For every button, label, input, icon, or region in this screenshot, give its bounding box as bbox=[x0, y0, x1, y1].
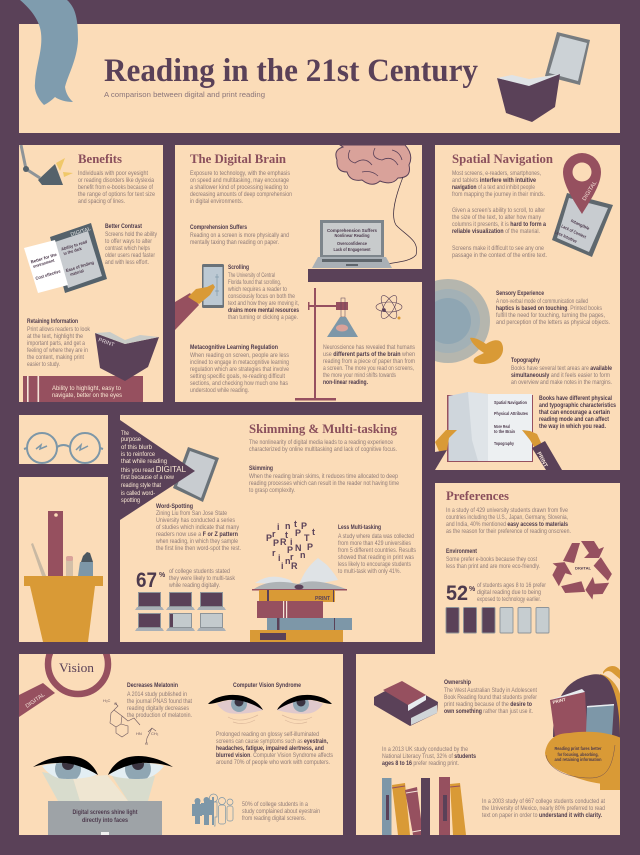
scattered letters: R bbox=[280, 537, 287, 547]
text block: eyestrain stat: 50% of college students in a bbox=[242, 801, 309, 808]
screen with caption: directly into faces bbox=[82, 817, 128, 824]
icon: laptop with list: Lack of Engagement bbox=[334, 247, 371, 252]
callout: triangle blurb: this you read DIGITAL bbox=[121, 464, 186, 474]
text block: ownership: print reading because of the desire to bbox=[444, 701, 532, 708]
text block: the range of options for text size bbox=[78, 191, 156, 198]
icon: touch circles and pointing hand bbox=[435, 279, 504, 364]
icon: pot bbox=[24, 576, 103, 642]
text block: retaining information: easier to study. bbox=[27, 361, 60, 368]
text block: comprehension suffers: Reading on a screen is more physically and bbox=[190, 232, 289, 239]
text block: decreases melatonin: A 2014 study published in bbox=[127, 691, 187, 698]
scattered letters: t bbox=[285, 530, 288, 540]
icon: recycle symbol bbox=[547, 541, 618, 603]
text block: Mexico study: In a 2003 study of 667 college students conducted at bbox=[482, 798, 605, 805]
callout: physical and typographic characteristics: the way in which you read. bbox=[539, 423, 606, 430]
red book spine callout bbox=[23, 376, 143, 402]
text block: decreases melatonin: the production of melatonin. bbox=[127, 712, 192, 719]
text block: environment: Some prefer e-books because they cost bbox=[446, 556, 537, 563]
text block: intro: in digital environments. bbox=[190, 198, 243, 205]
text block: intro: a shallower kind of processing leading to bbox=[190, 184, 289, 191]
panel: vision bbox=[19, 634, 343, 835]
icon: tablet bbox=[173, 447, 219, 502]
screen with caption: Digital screens shine light bbox=[72, 809, 138, 816]
text block: scrolling: consciously focus on both the bbox=[228, 293, 296, 300]
icon: marker bbox=[78, 552, 93, 576]
text block: intro: Exposure to technology, with the emphasis bbox=[190, 170, 290, 177]
text block: topography: Topography bbox=[511, 357, 540, 364]
text block: decreases melatonin bbox=[127, 682, 192, 719]
text block: and spacing of lines. bbox=[78, 198, 125, 205]
icon: open book held by hands: to the Brain bbox=[494, 429, 515, 434]
icon: melatonin molecule: O bbox=[114, 701, 117, 706]
text block: better contrast: Better Contrast bbox=[105, 223, 143, 230]
text block: ownership: Book Reading found that students prefer bbox=[444, 694, 537, 701]
text block: word-spotting: Word-Spotting bbox=[156, 503, 193, 510]
text block: intro bbox=[249, 439, 397, 453]
text block: metacognitive learning regulation: regulation which are strategies that involve bbox=[190, 366, 290, 373]
text block: environment: Environment bbox=[446, 548, 478, 555]
text block: scrolling: than turning or clicking a page. bbox=[228, 314, 298, 321]
icon: backpack bbox=[545, 666, 621, 790]
text block: context: Screens make it difficult to see any one bbox=[452, 245, 545, 252]
panel: header bbox=[19, 24, 620, 133]
text block: environment bbox=[446, 548, 540, 570]
text block: neuroscience: Neuroscience has revealed that humans bbox=[323, 344, 415, 351]
scattered letters: T bbox=[304, 533, 310, 543]
text block: scrolling: drains more mental resources bbox=[228, 307, 299, 314]
text block: ownership: Ownership bbox=[444, 679, 471, 686]
callout: triangle blurb: purpose bbox=[121, 436, 141, 443]
panel: benefits bbox=[19, 145, 163, 402]
tablet and page comparison: DIGITAL bbox=[70, 226, 92, 238]
text block: retaining information: Print allows readers to look bbox=[27, 326, 91, 333]
text block: UK study bbox=[382, 746, 477, 767]
text block: UK study: National Literacy Trust, 32% of students bbox=[382, 753, 477, 760]
icon: desk lamp bbox=[21, 145, 73, 185]
scattered letters: R bbox=[291, 561, 298, 571]
stat: 67 percent: 67 bbox=[136, 569, 157, 592]
icon: stack of books bbox=[250, 558, 352, 642]
scattered letters: t bbox=[294, 519, 297, 529]
text block: intro: as the reason for their preference of reading onscreen. bbox=[446, 528, 571, 535]
chart: laptop pictogram bbox=[135, 592, 226, 631]
icon: open book held by hands: Spatial Navigation bbox=[494, 400, 527, 405]
text block: intro: decreasing amounts of deep comprehension bbox=[190, 191, 292, 198]
text block: word-spotting: when reading, in which they sample bbox=[155, 538, 239, 545]
text block bbox=[78, 170, 156, 205]
callout: physical and typographic characteristics: reading mode and can affect bbox=[539, 416, 610, 423]
callout: physical and typographic characteristics bbox=[539, 395, 616, 430]
text block: retaining information: the content, making print bbox=[27, 354, 84, 361]
text block: neuroscience: a screen. The more you read on screens, bbox=[323, 365, 414, 372]
icon: tired eyes bbox=[208, 695, 332, 724]
scattered letters: r bbox=[272, 548, 276, 558]
text block: sensory experience: Sensory Experience bbox=[496, 290, 544, 297]
text block: decreases melatonin: Decreases Melatonin bbox=[127, 682, 178, 689]
text block: intuitive navigation: Most screens, e-readers, smartphones, bbox=[452, 170, 541, 177]
text block: skimming: When the reading brain skims, it reduces time allocated to deep bbox=[249, 473, 399, 480]
text block: less multi-tasking: Less Multi-tasking bbox=[338, 524, 381, 531]
icon: glasses bbox=[24, 433, 103, 463]
text block: better contrast bbox=[105, 223, 158, 266]
text block: intuitive navigation: and tablets interfere with intuitive bbox=[452, 177, 537, 184]
text block: retaining information: important parts, and get a bbox=[27, 340, 86, 347]
text block: UK study: In a 2013 UK study conducted by the bbox=[382, 746, 469, 753]
heading: Spatial Navigation bbox=[452, 151, 554, 166]
callout: physical and typographic characteristics: Books have different physical bbox=[539, 395, 612, 402]
text block: word-spotting: the first line then word-spot the rest. bbox=[156, 545, 241, 552]
text block: better contrast: older users read faster bbox=[105, 252, 155, 259]
text block: scrolling bbox=[227, 264, 299, 321]
text block: metacognitive learning regulation bbox=[190, 344, 290, 394]
text block: intro bbox=[190, 170, 292, 205]
text block: metacognitive learning regulation: understood while reading. bbox=[190, 387, 249, 394]
text block: comprehension suffers bbox=[190, 224, 289, 246]
icon: laptop with list: Nonlinear Reading bbox=[334, 233, 370, 238]
scattered letters: n bbox=[285, 556, 290, 566]
scattered letters: P bbox=[295, 528, 301, 538]
panel: pencil pot bbox=[19, 477, 108, 642]
text block: ownership: own something rather than just use it. bbox=[444, 708, 533, 715]
text block: comprehension suffers: Comprehension Suffers bbox=[190, 224, 247, 231]
icon: open book held by hands: Topography bbox=[494, 441, 514, 446]
panel: preferences bbox=[356, 483, 621, 835]
text block: visualization: reliable visualization of the material. bbox=[452, 228, 540, 235]
text block: less multi-tasking: from 5 different countries. Results bbox=[338, 547, 416, 554]
text block: computer vision syndrome: around 70% of people who work with computers. bbox=[216, 759, 330, 766]
tablet and page comparison bbox=[24, 223, 107, 293]
icon: melatonin molecule: O bbox=[145, 741, 148, 746]
scattered letters: i bbox=[290, 537, 293, 547]
scattered letters: i bbox=[281, 561, 284, 571]
icon: brain bbox=[336, 145, 417, 264]
heading: Preferences bbox=[446, 488, 509, 503]
text block: eyestrain stat: from reading digital screens. bbox=[242, 815, 306, 822]
text block: better contrast: to offer ways to alter bbox=[105, 238, 152, 245]
text block: topography bbox=[511, 357, 613, 386]
text block: sensory experience: fulfill the need for touching, turning the pages, bbox=[496, 312, 605, 319]
text block: better contrast: and with less effort. bbox=[105, 259, 149, 266]
text block: comprehension suffers: mentally taxing than reading on paper. bbox=[190, 239, 279, 246]
text block: Mexico study bbox=[482, 798, 605, 819]
text block: environment: less than print and are more eco-friendly. bbox=[446, 563, 540, 570]
text block: benefit from e-books because of bbox=[78, 184, 153, 191]
text block: better contrast: Screens hold the ability bbox=[105, 231, 158, 238]
icon: print book: PRINT bbox=[97, 337, 115, 349]
icon: melatonin molecule: H₃C bbox=[103, 698, 111, 703]
text block: context: passage in the context of the entire text. bbox=[452, 252, 547, 259]
stat: 52 percent bbox=[446, 582, 546, 605]
icon: backpack: and retaining information bbox=[554, 757, 602, 762]
text block: topography: an overview and make notes in the margins. bbox=[511, 379, 612, 386]
callout: triangle blurb: is called word- bbox=[121, 490, 155, 497]
text block: visualization: the size of the text, to alter how many bbox=[452, 214, 542, 221]
icon: laptop with list: Overconfidence bbox=[337, 241, 368, 246]
text block: scrolling: Florida found that scrolling, bbox=[228, 279, 281, 286]
text block: neuroscience: non-linear reading. bbox=[323, 379, 368, 386]
icon: eraser bbox=[66, 556, 73, 576]
red book spine callout: navigate, better on the eyes bbox=[52, 392, 122, 399]
text block: metacognitive learning regulation: inclined to engage in metacognitive learning bbox=[190, 359, 289, 366]
scattered letters: n bbox=[285, 521, 290, 531]
light beams bbox=[42, 772, 155, 801]
text block: visualization: Given a screen's ability to scroll, to alter bbox=[452, 207, 545, 214]
icon: stack of books: PRINT bbox=[315, 596, 330, 602]
text block: metacognitive learning regulation: When reading on screen, people are less bbox=[190, 352, 289, 359]
icon: open book held by hands: PRINT bbox=[535, 451, 549, 469]
text block: scrolling: The University of Central bbox=[228, 272, 275, 279]
text block: Individuals with poor eyesight bbox=[78, 170, 148, 177]
heading: Benefits bbox=[78, 151, 122, 166]
stat: 67 percent bbox=[136, 568, 236, 592]
text block: sensory experience: and perception of the letters as physical objects. bbox=[496, 319, 610, 326]
stat: 52 percent: of students ages 8 to 16 prefer bbox=[477, 582, 546, 589]
icon: tablet and book bbox=[497, 32, 590, 122]
text block: retaining information bbox=[27, 318, 91, 368]
text block: better contrast: contrast which helps bbox=[105, 245, 150, 252]
text block: eyestrain stat: study complained about eyestrain bbox=[242, 808, 320, 815]
heading: Skimming & Multi-tasking bbox=[249, 421, 397, 436]
icon: map pin on tablet: Lack of Context bbox=[560, 223, 587, 240]
panel: skimming and multi-tasking bbox=[120, 415, 422, 642]
text block: less multi-tasking: to multi-task with only 41%. bbox=[338, 568, 401, 575]
icon: large eyes bbox=[33, 756, 173, 779]
scattered letters: P bbox=[307, 542, 313, 552]
text block: intuitive navigation: from mapping the journey in their minds. bbox=[452, 191, 545, 198]
tablet and page comparison: Cost effective bbox=[35, 268, 62, 281]
icon: recycle symbol: DIGITAL bbox=[575, 566, 592, 570]
text block: sensory experience: haptics is based on touching. Printed books bbox=[496, 305, 602, 312]
red book spine callout: Ability to highlight, easy to bbox=[52, 385, 122, 392]
text block: context bbox=[452, 245, 547, 259]
text block: intro: countries including the U.S., Japan, Germany, Slovenia, bbox=[446, 514, 568, 521]
scattered letters: P bbox=[266, 533, 272, 543]
text block: metacognitive learning regulation: Metacognitive Learning Regulation bbox=[190, 344, 278, 351]
subtitle: A comparison between digital and print reading bbox=[104, 90, 265, 99]
icon: ribbon bookmark bbox=[20, 0, 78, 105]
text block: visualization: columns it presents, it is hard to form a bbox=[452, 221, 547, 228]
callout: physical and typographic characteristics: that can encourage a certain bbox=[539, 409, 610, 416]
text block: word-spotting: of studies which indicate that many bbox=[156, 524, 240, 531]
text block: skimming: to grasp complexity. bbox=[249, 487, 295, 494]
text block: computer vision syndrome bbox=[216, 682, 333, 766]
icon: open book held by hands: More Real bbox=[494, 424, 510, 429]
chart: phone pictogram bbox=[446, 608, 549, 633]
text block: intuitive navigation: navigation of a text and inhibit people bbox=[452, 184, 535, 191]
scattered letters: P bbox=[301, 521, 307, 531]
callout: physical and typographic characteristics: and typographic characteristics bbox=[539, 402, 616, 409]
text block: less multi-tasking: less likely to encourage students bbox=[338, 561, 411, 568]
text block: or reading disorders like dyslexia bbox=[78, 177, 155, 184]
screen with caption bbox=[48, 801, 162, 835]
tablet and page comparison: Better for the bbox=[30, 252, 58, 265]
icon: atom bbox=[376, 293, 402, 321]
text block: skimming: reading processes which can result in the reader not having time bbox=[249, 480, 400, 487]
text block: less multi-tasking: showed that reading in print was bbox=[338, 554, 414, 561]
text block: retaining information: Retaining Information bbox=[27, 318, 78, 325]
tablet and page comparison: Ease of finding bbox=[65, 260, 95, 273]
scattered letters: N bbox=[295, 543, 302, 553]
icon: map pin on tablet: DIGITAL bbox=[582, 180, 598, 202]
scattered letters: i bbox=[277, 522, 280, 532]
panel: spatial navigation bbox=[435, 145, 620, 470]
text block: intro: characterized by online multitasking and lack of cognitive focus. bbox=[249, 446, 397, 453]
icon: hand scrolling phone bbox=[175, 264, 224, 330]
text block: computer vision syndrome: Computer Vision Syndrome bbox=[233, 682, 301, 689]
stat: 67 percent: of college students stated bbox=[169, 568, 230, 575]
text block: retaining information: feeling of where they are in bbox=[27, 347, 88, 354]
text block: Mexico study: the University of Mexico, nearly 80% preferred to read bbox=[482, 805, 605, 812]
icon: laptop with list: Comprehension Suffers bbox=[327, 228, 378, 233]
icon: pencil bbox=[31, 543, 46, 576]
text block: topography: Books have several text areas are available bbox=[511, 365, 613, 372]
text block: intro: The nonlinearity of digital media leads to a reading experience bbox=[249, 439, 394, 446]
stat: 52 percent: exposed to technology earlier. bbox=[477, 596, 541, 603]
icon: melatonin molecule: HN bbox=[136, 731, 142, 736]
text block: sensory experience: A non-verbal mode of communication called bbox=[496, 298, 588, 305]
icon: backpack: Reading print fares better bbox=[554, 746, 602, 751]
icon: open book held by hands bbox=[435, 392, 562, 470]
heading: Vision bbox=[59, 661, 95, 675]
scattered letters: P bbox=[273, 538, 279, 548]
text block: neuroscience bbox=[323, 344, 415, 386]
icon: melatonin molecule: CH₃ bbox=[151, 731, 159, 736]
text block: word-spotting: University has conducted a series bbox=[156, 517, 235, 524]
scattered letters: r bbox=[290, 552, 294, 562]
icon: backpack: for focusing, absorbing, bbox=[558, 752, 598, 757]
text block: visualization bbox=[452, 207, 547, 235]
icon: map pin on tablet bbox=[552, 153, 613, 257]
stat: 67 percent: while reading digitally. bbox=[168, 582, 220, 589]
callout: triangle blurb: spotting bbox=[121, 497, 140, 504]
callout: triangle blurb: of this blurb bbox=[121, 444, 153, 451]
callout: triangle blurb: that while reading bbox=[121, 458, 168, 465]
text block: skimming: Skimming bbox=[249, 465, 273, 472]
panel: the digital brain bbox=[175, 145, 422, 402]
text block: scrolling: text and how they are moving it, bbox=[228, 300, 299, 307]
icon: magnifying glass bbox=[19, 654, 112, 717]
scattered letters: r bbox=[272, 529, 276, 539]
text block: neuroscience: reading from a piece of paper than from bbox=[323, 358, 415, 365]
text block: word-spotting bbox=[155, 503, 241, 552]
callout: triangle blurb: is to reinforce bbox=[121, 451, 156, 458]
scattered letters: n bbox=[300, 550, 306, 560]
heading: The Digital Brain bbox=[190, 151, 287, 166]
text block: less multi-tasking: A study where data was collected bbox=[338, 533, 414, 540]
text block: intuitive navigation bbox=[452, 170, 545, 198]
text block: word-spotting: Zining Liu from San Jose State bbox=[156, 510, 228, 517]
stat: 52 percent: digital reading due to being bbox=[477, 589, 541, 596]
text block: neuroscience: the more your mind shifts towards bbox=[323, 372, 396, 379]
stat: 52 percent: % bbox=[469, 586, 476, 593]
tablet and page comparison: Ability to read bbox=[60, 239, 88, 252]
callout: triangle blurb: first because of a new bbox=[121, 474, 174, 481]
scattered letters bbox=[266, 519, 315, 571]
text block: computer vision syndrome: blurred vision. Computer Vision Syndrome affects bbox=[216, 752, 333, 759]
text block: Mexico study: text on paper in order to understand it with clarity. bbox=[482, 812, 602, 819]
text block: less multi-tasking: from more than 429 universities bbox=[338, 540, 411, 547]
icon: ruler bbox=[48, 511, 63, 576]
icon: map pin on tablet: Less Intuitive bbox=[554, 229, 578, 244]
text block: decreases melatonin: the journal PNAS found that bbox=[127, 698, 192, 705]
text block: eyestrain stat bbox=[242, 801, 320, 822]
icon: melatonin molecule bbox=[103, 698, 159, 746]
text block: computer vision syndrome: screens can cause symptoms such as eyestrain, bbox=[216, 738, 328, 745]
icon: backpack: PRINT bbox=[552, 697, 567, 705]
title: Reading in the 21st Century bbox=[104, 53, 478, 89]
text block: ownership bbox=[444, 679, 537, 715]
tablet and page comparison: material bbox=[69, 268, 84, 277]
text block: metacognitive learning regulation: setting specific goals, re-reading difficult bbox=[190, 373, 285, 380]
divider bar bbox=[308, 269, 422, 282]
text block: computer vision syndrome: headaches, fatigue, impaired alertness, and bbox=[216, 745, 324, 752]
text block: less multi-tasking bbox=[338, 524, 416, 575]
text block: word-spotting: readers now use a F or Z pattern bbox=[156, 531, 238, 538]
text block: neuroscience: use different parts of the brain when bbox=[323, 351, 415, 358]
text block: metacognitive learning regulation: sections, and checking how much one has bbox=[190, 380, 288, 387]
stat: 67 percent: they were likely to multi-task bbox=[169, 575, 236, 582]
text block: intro bbox=[446, 507, 571, 535]
icon: open book held by hands: Physical Attributes bbox=[494, 411, 528, 416]
text block: computer vision syndrome: Prolonged reading on glossy self-illuminated bbox=[216, 731, 319, 738]
text block: intro: In a study of 429 university students drawn from five bbox=[446, 507, 569, 514]
icon: print book bbox=[95, 332, 159, 381]
tablet and page comparison: environment bbox=[32, 258, 55, 269]
callout: triangle blurb: reading style that bbox=[121, 482, 161, 489]
text block: intro: and India, 40% mentioned easy access to materials bbox=[446, 521, 569, 528]
scattered letters: P bbox=[287, 545, 293, 555]
icon: laptop with list bbox=[312, 220, 392, 268]
callout: triangle blurb: The bbox=[121, 430, 129, 437]
text block: topography: simultaneously and it feels easier to form bbox=[511, 372, 610, 379]
stat: 52 percent: 52 bbox=[446, 582, 468, 605]
text block: sensory experience bbox=[496, 290, 610, 326]
panel: glasses bbox=[19, 415, 108, 464]
text block: UK study: ages 8 to 16 prefer reading print. bbox=[382, 760, 459, 767]
icon: map pin on tablet: Intangible bbox=[570, 218, 591, 231]
text block: intro: on speed and multitasking, may encourage bbox=[190, 177, 290, 184]
text block: decreases melatonin: reading digitally decreases bbox=[127, 705, 189, 712]
scattered letters: i bbox=[278, 553, 281, 563]
text block: retaining information: at the text, highlight the bbox=[27, 333, 84, 340]
icon: row of books bbox=[382, 777, 466, 835]
callout: triangle blurb bbox=[120, 420, 195, 520]
text block: skimming bbox=[249, 465, 400, 494]
stat: 67 percent: % bbox=[159, 572, 166, 579]
text block: scrolling: Scrolling bbox=[228, 264, 249, 271]
scattered letters: t bbox=[312, 527, 315, 537]
icon: group of people bbox=[192, 794, 233, 826]
text block: ownership: The West Australian Study in Adolescent bbox=[444, 687, 537, 694]
icon: magnifying glass: DIGITAL bbox=[25, 692, 46, 710]
icon: lab stand with flask bbox=[295, 288, 358, 400]
icon: stacked books bbox=[374, 681, 438, 726]
tablet and page comparison: in the dark bbox=[63, 246, 83, 256]
text block: scrolling: which requires a reader to bbox=[227, 286, 288, 293]
